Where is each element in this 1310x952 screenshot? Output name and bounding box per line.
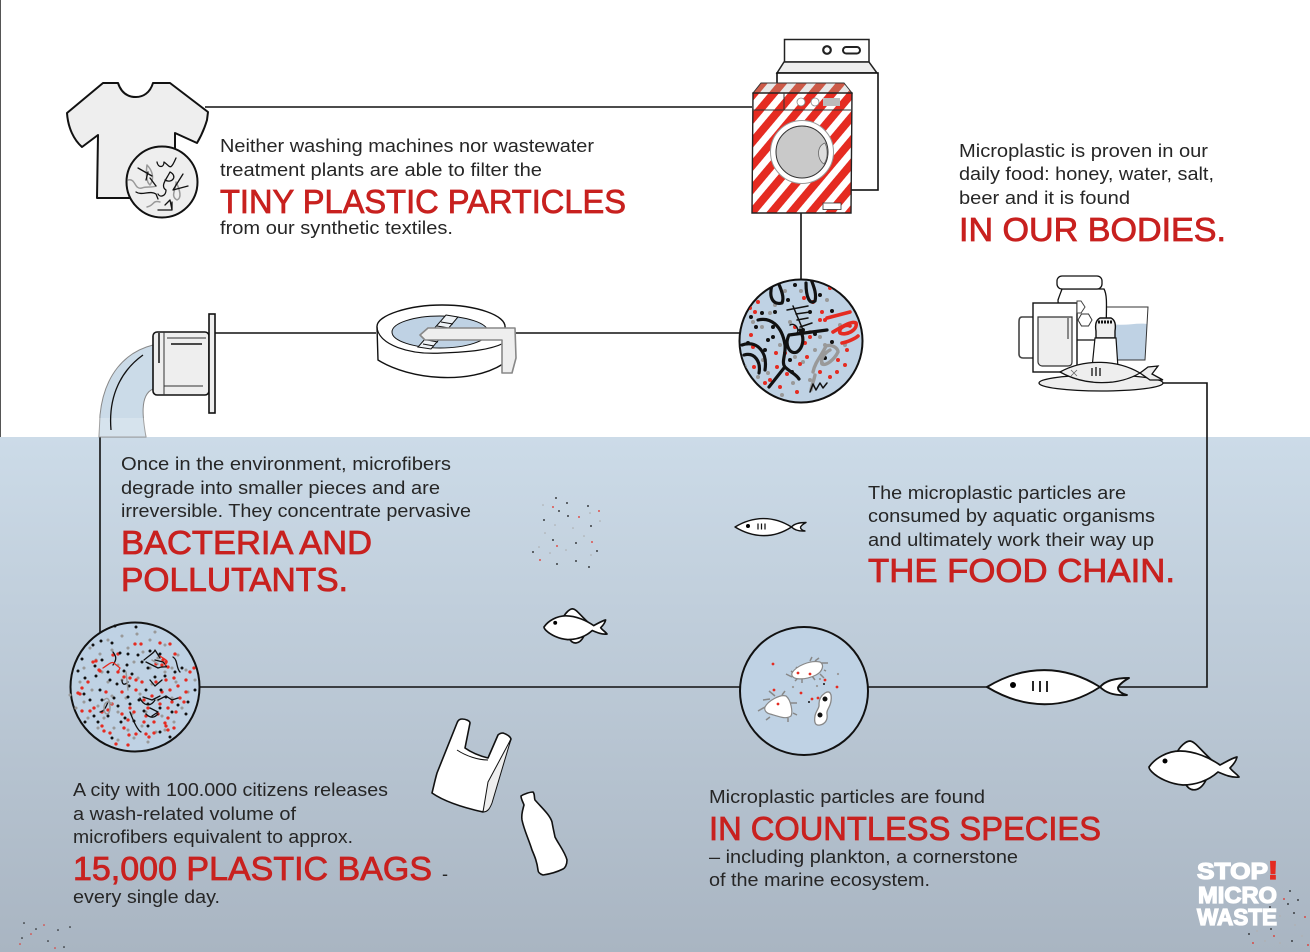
scattered particles bottom left [20, 923, 70, 948]
text block: in our bodies: daily food: honey, water, salt, [959, 164, 1214, 184]
icon: striped washing machine in front [752, 83, 852, 213]
text block: in countless species: Microplastic particles are found [709, 787, 985, 807]
text block: 15,000 plastic bags: - [442, 864, 448, 884]
text block: bacteria and pollutants: BACTERIA AND [121, 525, 372, 562]
text block: in countless species: IN COUNTLESS SPECIES [709, 811, 1101, 848]
text block: bacteria and pollutants: degrade into smaller pieces and are [121, 478, 440, 498]
icon: large round fish [1149, 741, 1239, 790]
icon: long fish on flow line [987, 670, 1129, 704]
text block: in countless species: – including plankton, a cornerstone [709, 847, 1018, 867]
text block: the food chain [868, 483, 1175, 590]
text block: bacteria and pollutants: Once in the environment, microfibers [121, 454, 451, 474]
text block: in our bodies: Microplastic is proven in our [959, 141, 1208, 161]
text block: in countless species [709, 787, 1101, 890]
magnified circle: dense microplastics [70, 622, 200, 752]
icon: round fish in water [544, 609, 607, 643]
scattered microplastic particles [533, 498, 600, 567]
text block: tiny plastic particles: TINY PLASTIC PARTICLES [220, 184, 626, 221]
logo: stop micro waste: STOP [1197, 858, 1268, 884]
logo: stop micro waste: WASTE [1197, 904, 1277, 930]
microfibre circle on the t-shirt [126, 146, 198, 218]
magnified circle: organisms with microplastic [740, 627, 868, 755]
text block: the food chain: THE FOOD CHAIN. [868, 553, 1175, 590]
text block: 15,000 plastic bags: a wash-related volume of [73, 804, 297, 824]
icon: wastewater treatment tank [377, 305, 516, 378]
text block: in countless species: of the marine ecosystem. [709, 870, 930, 890]
organism: round plankton [758, 691, 797, 722]
text block: tiny plastic particles [220, 136, 626, 238]
text block: bacteria and pollutants [121, 454, 471, 599]
text block: 15,000 plastic bags: A city with 100.000 citizens releases [73, 780, 388, 800]
text block: tiny plastic particles: treatment plants are able to filter the [220, 160, 542, 180]
text block: 15,000 plastic bags: every single day. [73, 887, 220, 907]
icon: outflow pipe [153, 314, 215, 413]
icon: t-shirt with microfibres [67, 83, 208, 218]
icon: washing machine in back [777, 40, 878, 190]
text block: 15,000 plastic bags: 15,000 PLASTIC BAGS [73, 851, 432, 888]
logo: stop micro waste: MICRO [1198, 882, 1277, 908]
logo: stop micro waste: ! [1268, 857, 1278, 885]
text block: 15,000 plastic bags [73, 780, 448, 907]
logo: stop micro waste [1197, 857, 1278, 930]
text block: bacteria and pollutants: irreversible. They concentrate pervasive [121, 501, 471, 521]
icon: plastic bag [432, 719, 511, 812]
text block: the food chain: and ultimately work their way up [868, 530, 1154, 550]
organism: two-cell plankton [815, 692, 831, 725]
scattered particles bottom right [1249, 891, 1308, 945]
icon: honey jar, salt shaker, glass, mug, fish on plate [1019, 276, 1163, 391]
text block: the food chain: The microplastic particles are [868, 483, 1126, 503]
connecting flow line [100, 107, 1207, 687]
text block: in our bodies [959, 141, 1226, 249]
magnified circle: microfibres in wastewater [740, 279, 862, 402]
text block: tiny plastic particles: from our synthetic textiles. [220, 218, 453, 238]
text block: in our bodies: beer and it is found [959, 188, 1130, 208]
icon: slim fish in water [735, 519, 806, 536]
text block: tiny plastic particles: Neither washing machines nor wastewater [220, 136, 594, 156]
organism: elongated plankton [786, 657, 828, 683]
text block: the food chain: consumed by aquatic organisms [868, 506, 1155, 526]
icon: plastic bottle [521, 792, 567, 875]
text block: bacteria and pollutants: POLLUTANTS. [121, 562, 348, 599]
icon: water flowing from pipe [99, 345, 153, 437]
text block: 15,000 plastic bags: microfibers equivalent to approx. [73, 827, 353, 847]
text block: in our bodies: IN OUR BODIES. [959, 212, 1226, 249]
